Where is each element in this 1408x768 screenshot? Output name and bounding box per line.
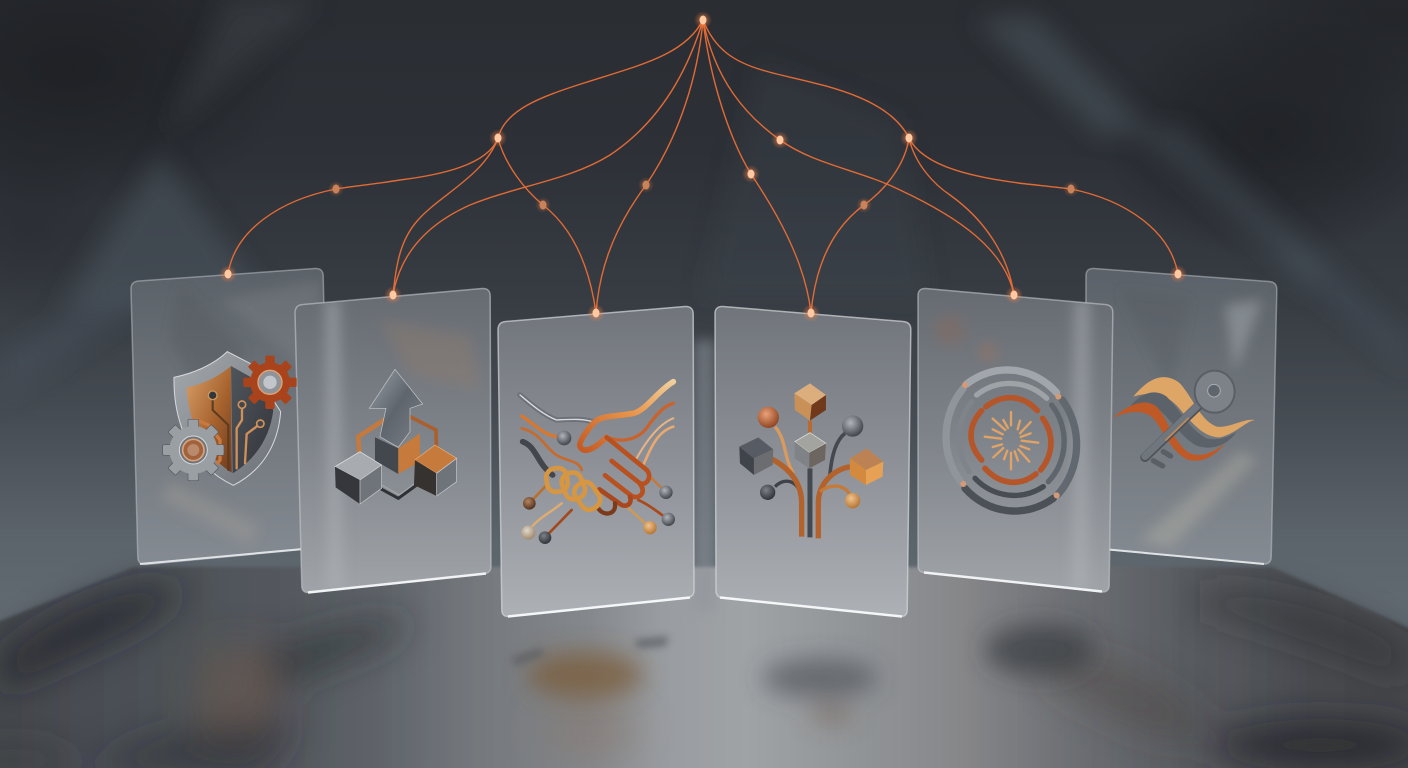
icon part: arrow [369, 369, 423, 447]
icon: key with flowing ribbons [1113, 371, 1255, 466]
icon part: center cube [795, 433, 826, 468]
connector nodes [219, 11, 1187, 322]
icon: arrow with linked cubes [335, 369, 457, 504]
glass panel 4 [715, 306, 911, 617]
icon part: right cube [414, 445, 457, 496]
icon: shield with gears [163, 352, 297, 485]
icon part: spheres [521, 431, 675, 544]
icon: concentric target with sunburst [946, 370, 1077, 511]
floor with reflections [0, 340, 1408, 768]
icon part: center cube [375, 433, 420, 474]
glass panel 3 [498, 306, 694, 617]
icon part: copper gear [243, 356, 297, 409]
icon part: knuckle rings [545, 467, 604, 513]
glass panel 5 [918, 288, 1113, 592]
glass panel 2 [295, 288, 491, 593]
connector lines [228, 20, 1178, 313]
icon part: steel gear [163, 419, 224, 481]
icon part: spheres [758, 407, 863, 508]
glass panel 6 [1085, 268, 1277, 564]
icon part: top cube [794, 383, 826, 421]
icon: branching tree with cubes [739, 383, 883, 538]
icon part: key [1145, 371, 1235, 466]
light gap between central panels [694, 340, 715, 610]
icon part: left cube [739, 437, 773, 475]
glass panel 1 [131, 268, 329, 565]
icon part: right cube [850, 448, 883, 485]
icon: circuit handshake [520, 382, 675, 544]
icon part: left cube [335, 452, 382, 504]
